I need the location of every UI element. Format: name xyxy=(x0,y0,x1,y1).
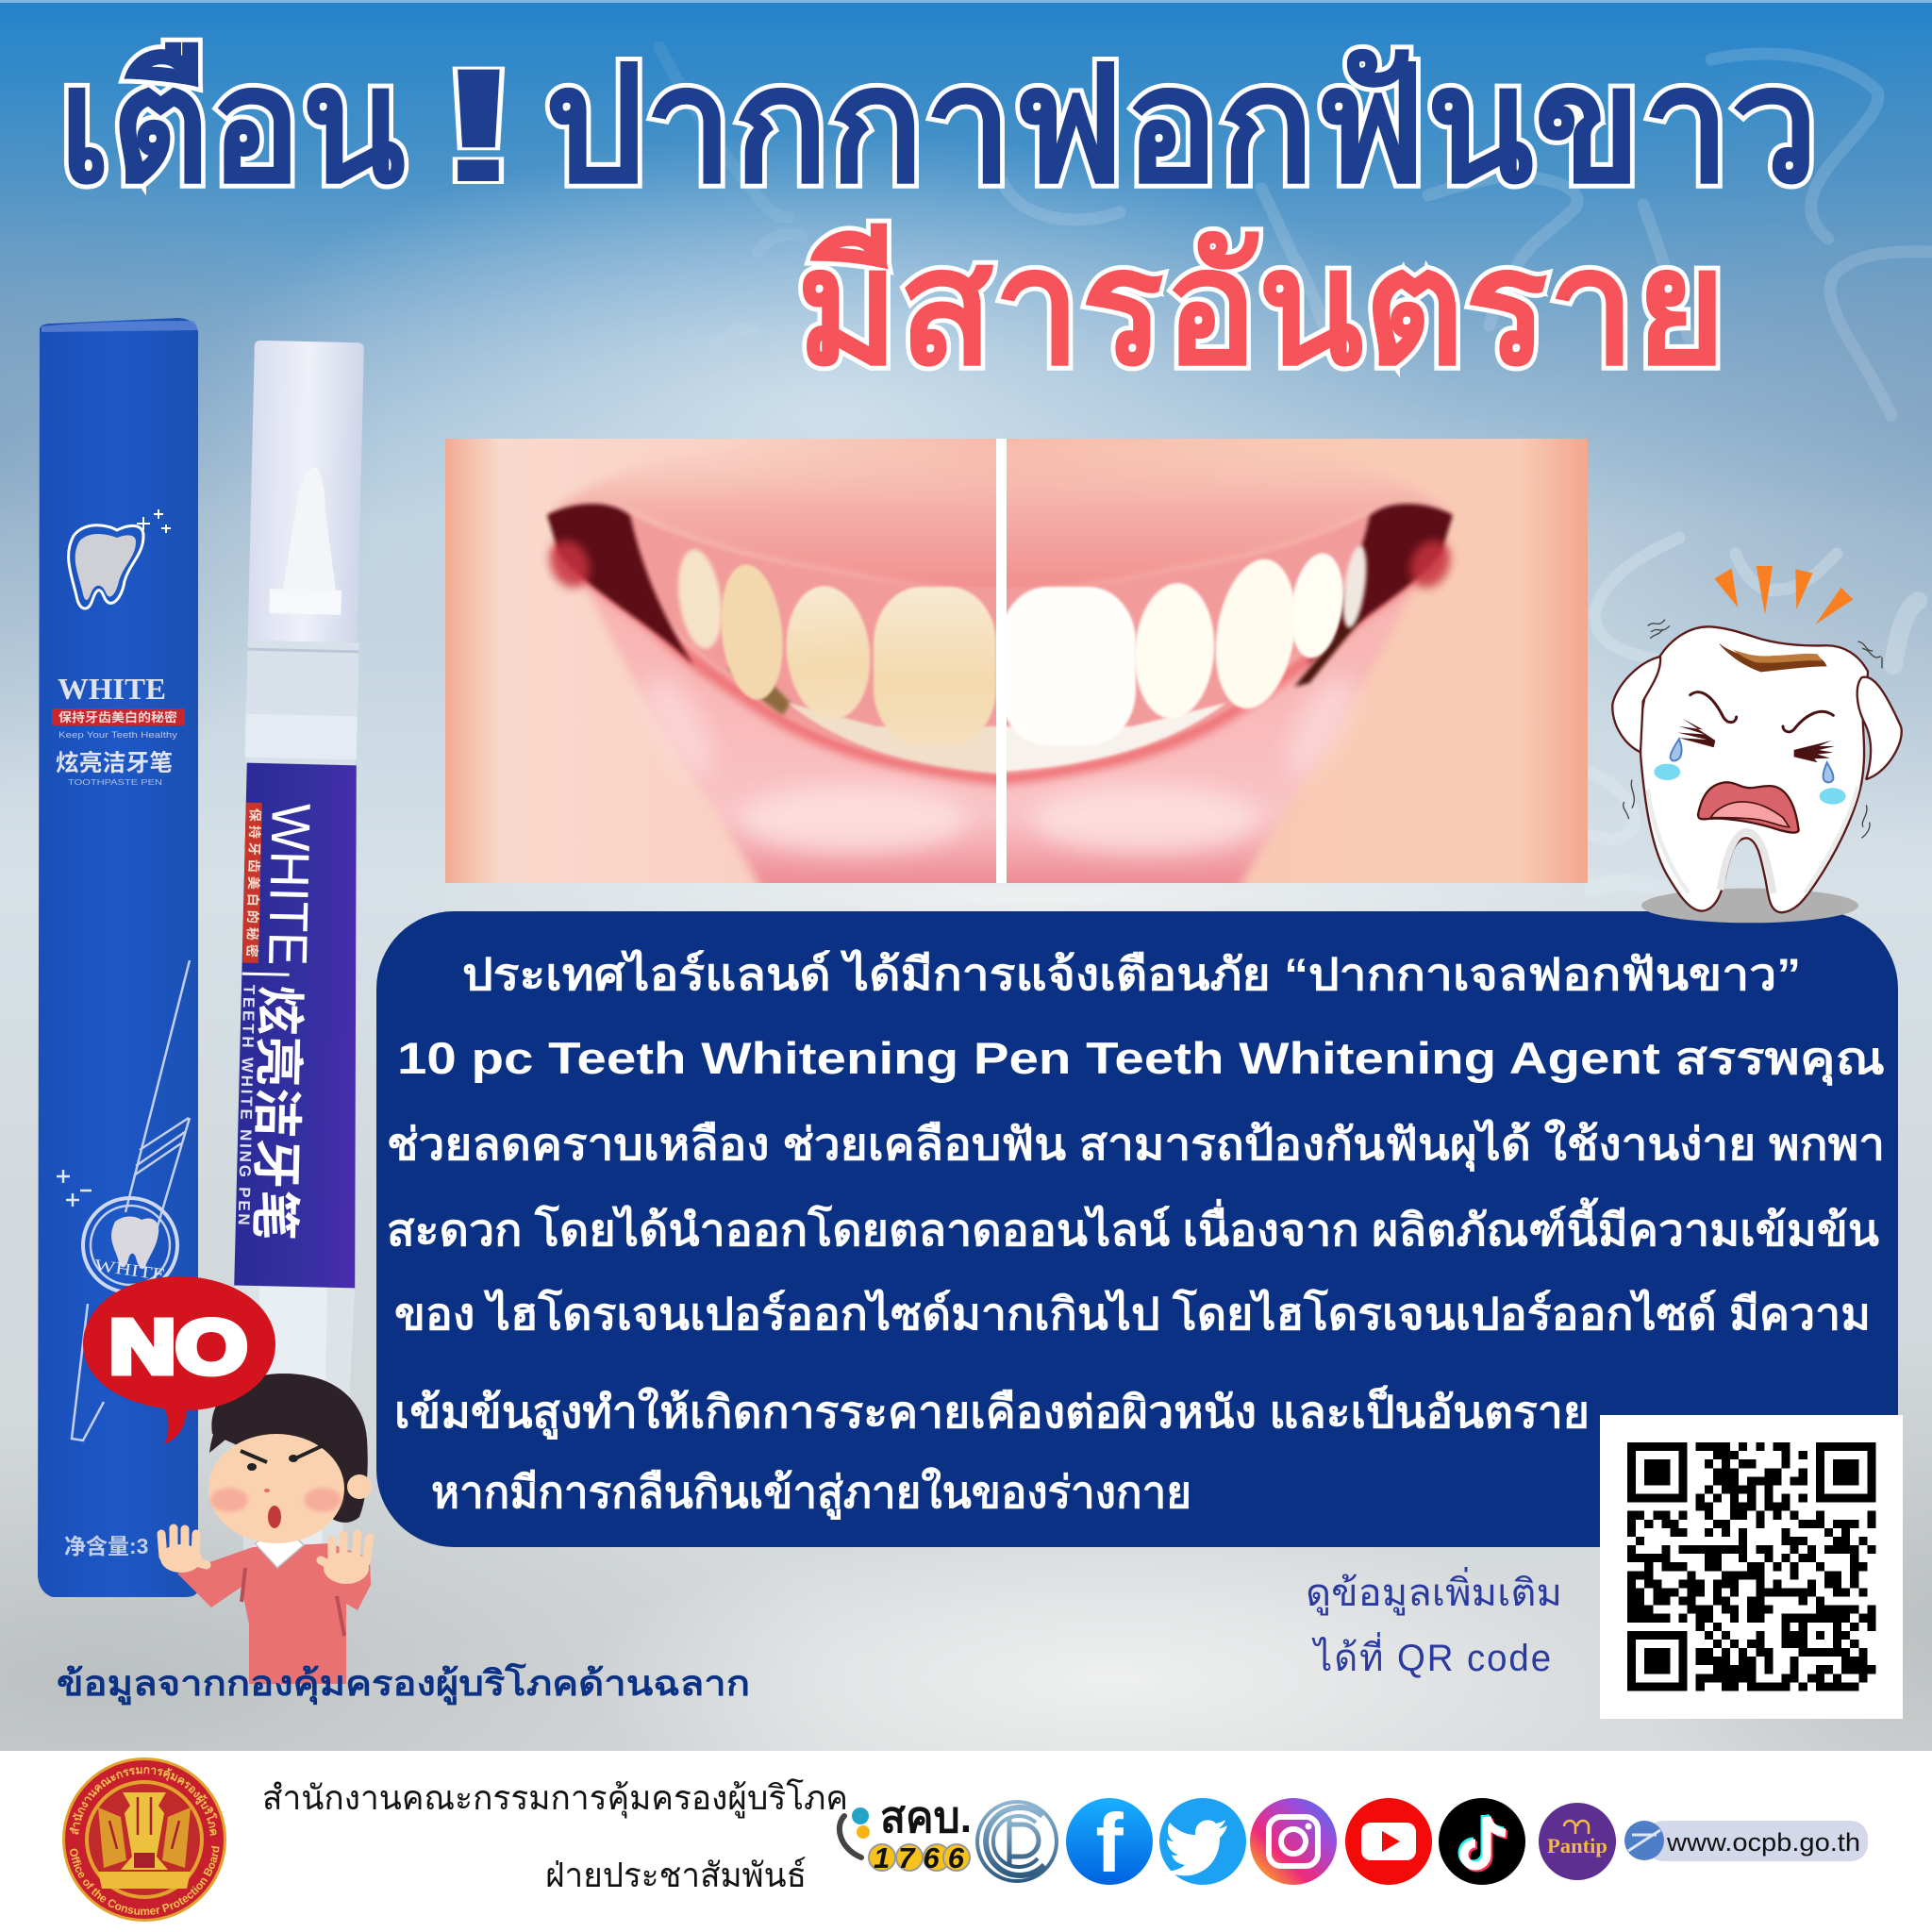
icon: crying tooth xyxy=(1612,566,1902,923)
logo: OCPB mark xyxy=(977,1802,1057,1881)
logo: hotline 1766 xyxy=(840,1792,972,1874)
hand right xyxy=(321,1534,370,1584)
smile photo xyxy=(445,438,1588,891)
panel text: ของ ไฮโดรเจนเปอร์ออกไซด์มากเกินไป โดยไฮโดรเจนเปอร์ออกไซด์ มีความ xyxy=(394,1288,1871,1339)
title line 2: มีสารอันตราย xyxy=(796,217,1726,398)
footer text xyxy=(262,1778,848,1894)
product box: TOOTHPASTE PEN xyxy=(68,778,162,787)
QR code xyxy=(1600,1415,1903,1719)
product box xyxy=(38,318,198,1597)
title line 1: ปากกาฟอกฟันขาว xyxy=(544,35,1819,216)
icon: facebook: f xyxy=(1095,1796,1124,1890)
icon: youtube xyxy=(1345,1798,1432,1885)
panel text xyxy=(387,948,1885,1521)
source note: ข้อมูลจากกองคุ้มครองผู้บริโภคด้านฉลาก xyxy=(57,1662,750,1706)
pen illustration on box xyxy=(57,960,190,1441)
logo: OCPB seal: Office of the Consumer Protection Board xyxy=(70,1845,220,1915)
panel text: สะดวก โดยได้นำออกโดยตลาดออนไลน์ เนื่องจาก ผลิตภัณฑ์นี้มีความเข้มข้น xyxy=(387,1197,1879,1255)
product pen: 保持牙齿美白的秘密 xyxy=(244,808,263,958)
icon: pantip xyxy=(1539,1803,1616,1880)
hair back xyxy=(211,1374,368,1523)
QR caption: ดูข้อมูลเพิ่มเติม xyxy=(1306,1567,1562,1615)
panel text: เข้มข้นสูงทำให้เกิดการระคายเคืองต่อผิวหนัง และเป็นอันตราย xyxy=(394,1384,1590,1441)
product box: WHITE xyxy=(93,1256,167,1284)
icon: pantip: Pantip xyxy=(1547,1834,1607,1857)
icon: facebook xyxy=(1066,1796,1153,1890)
panel text: 10 pc Teeth Whitening Pen Teeth Whitening Agent สรรพคุณ xyxy=(397,1033,1885,1086)
right half: white teeth xyxy=(991,438,1588,891)
NO speech bubble: NO xyxy=(109,1305,247,1389)
icon: woman with hands up xyxy=(160,1374,372,1684)
panel text: ช่วยลดคราบเหลือง ช่วยเคลือบฟัน สามารถป้องกันฟันผุได้ ใช้งานง่าย พกพา xyxy=(387,1118,1885,1172)
QR caption xyxy=(1306,1567,1562,1679)
NO speech bubble xyxy=(83,1276,275,1444)
footer xyxy=(0,1751,1932,1922)
icon: twitter xyxy=(1159,1798,1246,1885)
icon: tiktok xyxy=(1439,1798,1525,1885)
logo: hotline 1766: 1766 xyxy=(874,1841,965,1874)
hand left xyxy=(160,1528,207,1573)
product pen: WHITE xyxy=(257,803,322,966)
pen cap xyxy=(248,341,364,644)
product box: 净含量:3 xyxy=(64,1534,148,1558)
website pill xyxy=(1624,1821,1868,1861)
product pen xyxy=(225,341,376,1599)
logo: OCPB seal: สำนักงานคณะกรรมการคุ้มครองผู้บริโภค xyxy=(70,1767,218,1836)
website pill: www.ocpb.go.th xyxy=(1666,1828,1860,1857)
title line 1: เตือน xyxy=(58,35,406,216)
product box: 炫亮洁牙笔 xyxy=(56,750,173,776)
icon: instagram xyxy=(1250,1798,1337,1885)
logo: OCPB seal xyxy=(62,1757,226,1922)
product pen: 炫亮洁牙笔 xyxy=(245,985,307,1241)
product pen: TEETH WHITE NING PEN xyxy=(235,985,258,1225)
title line 1: ! xyxy=(430,35,527,216)
footer text: สำนักงานคณะกรรมการคุ้มครองผู้บริโภค xyxy=(262,1778,848,1819)
sweater xyxy=(177,1543,371,1684)
panel text: ประเทศไอร์แลนด์ ได้มีการแจ้งเตือนภัย “ปากกาเจลฟอกฟันขาว” xyxy=(462,948,1801,999)
logo: hotline 1766: สคบ. xyxy=(880,1792,972,1841)
QR caption: ได้ที่ QR code xyxy=(1311,1632,1553,1679)
product box: Keep Your Teeth Healthy xyxy=(58,730,178,740)
icon: tooth on box xyxy=(69,509,171,608)
product box: 保持牙齿美白的秘密 xyxy=(58,710,177,724)
pen label xyxy=(234,763,367,1288)
product box: WHITE xyxy=(58,672,166,706)
left half: yellow teeth xyxy=(445,438,1009,891)
text panel xyxy=(376,911,1898,1547)
panel text: หากมีการกลืนกินเข้าสู่ภายในของร่างกาย xyxy=(431,1466,1191,1521)
footer text: ฝ่ายประชาสัมพันธ์ xyxy=(545,1856,807,1894)
